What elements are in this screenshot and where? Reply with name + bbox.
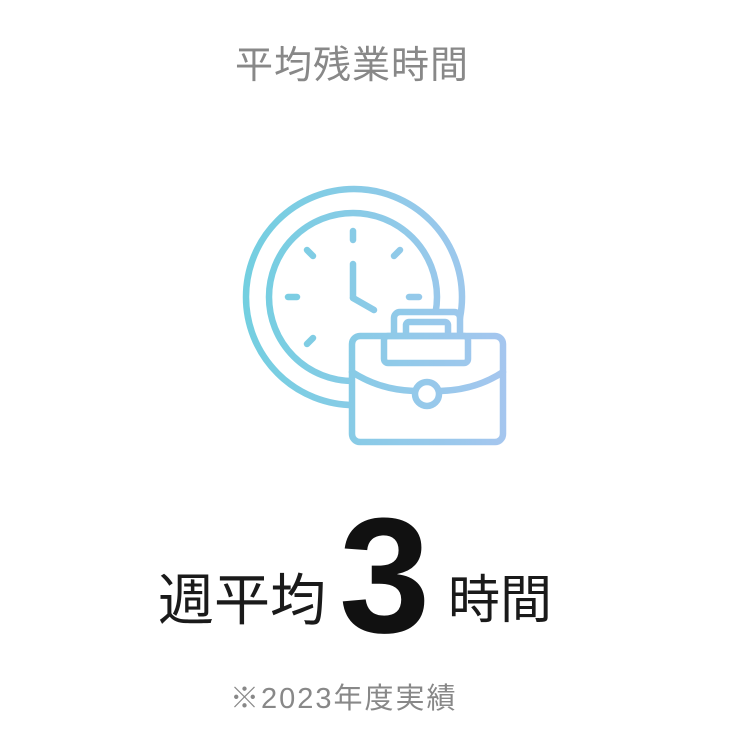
number: 3: 3: [339, 484, 430, 667]
title: 平均残業時間: [235, 45, 469, 87]
text: 時間: 時間: [448, 572, 552, 630]
icon: clock: [246, 189, 462, 405]
icon: briefcase: [352, 312, 503, 442]
footnote: ※2023年度実績: [230, 683, 458, 715]
main figure: weekly average 3 hours: [158, 484, 552, 667]
text: 週平均: 週平均: [158, 569, 326, 632]
